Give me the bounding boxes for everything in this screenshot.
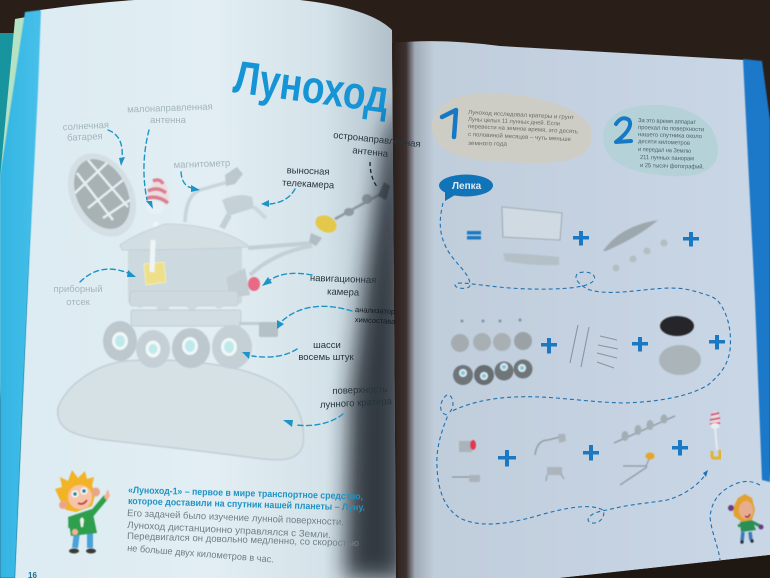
text block: description of Lunokhod-1: не больше двух километров в час. [127,543,274,566]
plus 4 [632,337,648,352]
right page blue strip [743,59,770,482]
dashed route [437,203,760,560]
navigation camera [226,268,260,298]
digit 2 [616,118,631,142]
title: Луноход [231,50,392,123]
panel: fact 1 bubble: Луны целых 11 лунных дней. Если [468,116,560,127]
step: navigation camera part [452,440,480,482]
plus 8 [672,440,688,456]
panel: fact 1 bubble [432,93,592,163]
labels and arrows: high-gain antenna: антенна [352,145,389,160]
labels and arrows: magnetometer: магнитометр [173,158,230,171]
step: antenna rod and arm [614,414,675,485]
speech bubble: modelling: Лепка [452,181,482,192]
text block: description of Lunokhod-1: Его задачей было изучение лунной поверхности. [127,508,344,528]
labels and arrows: chassis: шасси [313,340,341,351]
plus 6 [498,450,516,466]
text block: description of Lunokhod-1 [127,485,365,566]
labels and arrows: low-gain antenna: малонаправленная [127,102,213,115]
labels and arrows: solar battery: батарея [67,131,103,144]
plus 2 [683,232,699,246]
solar panel [54,142,150,248]
step: dark and grey discs [659,316,701,375]
wheels [103,321,252,369]
labels and arrows: low-gain antenna [127,102,213,209]
labels and arrows: high-gain antenna: остронаправленная [333,130,421,150]
step: wheels parts [451,318,532,385]
book cover edge: teal [0,33,16,180]
instrument body [128,246,242,304]
digit 1 [442,110,456,137]
labels and arrows: navigation camera: камера [327,286,360,299]
panel: fact 2 bubble: За это время аппарат [638,118,696,126]
panel: fact 1 bubble: Луноход исследовал кратеры и грунт [468,110,574,121]
step: assembled antenna [710,411,720,458]
labels and arrows: instrument bay [53,269,136,308]
panel: fact 2 bubble: проехал по поверхности [638,125,704,133]
panel: fact 2 bubble [603,105,718,176]
panel: fact 2 bubble: и передал на Землю [638,147,692,155]
labels and arrows: magnetometer [173,158,230,192]
panel: fact 2 bubble: десяти километров [638,139,690,147]
labels and arrows: instrument bay: отсек [66,297,91,308]
step: equals and slab parts [467,207,562,265]
labels and arrows: chassis: восемь штук [298,352,355,363]
lid [120,224,250,250]
plus 3 [541,338,557,354]
chemical analyzer [239,322,278,337]
plus 7 [583,445,599,460]
panel: fact 1 bubble: перевести на земное время, это десять [468,124,578,135]
labels and arrows: low-gain antenna: антенна [150,115,187,126]
magnetometer [185,167,243,222]
panel: fact 2 bubble: 211 лунных панорам [640,155,694,162]
crater surface [58,360,303,460]
panel: left page [15,0,396,578]
panel: fact 1 bubble: земного года [468,141,508,148]
left page blue strip [0,10,41,578]
labels and arrows: instrument bay: приборный [53,284,103,295]
step: thin rods [570,325,618,368]
panel: fact 2 bubble: и 25 тысяч фотографий. [640,162,704,171]
labels and arrows: external camera [261,165,335,207]
panel: fact 2 bubble: нашего спутника около [638,132,703,140]
bumpers [130,291,238,312]
text block: description of Lunokhod-1: которое доставили на спутник нашей планеты – Луну. [128,496,365,514]
labels and arrows: solar battery: солнечная [62,120,109,133]
labels and arrows: chemical analyzer: химсостава [355,315,396,326]
book edge: green page stack [0,17,26,400]
labels and arrows: external camera: выносная [286,165,330,178]
rover illustration [54,142,390,460]
high-gain antenna arm [248,182,390,275]
labels and arrows: chassis [242,340,355,363]
yellow block [144,262,166,285]
text block: description of Lunokhod-1: Луноход дистанционно управлялся с Земли. [127,520,331,541]
labels and arrows: navigation camera [262,273,376,299]
labels and arrows: crater surface: лунного кратера [320,396,393,411]
panel: fact 1 bubble: с половиной месяцев – чуть меньше [468,131,572,143]
labels and arrows: high-gain antenna [333,130,421,188]
step: crescent and balls [603,220,668,272]
labels and arrows: solar battery [62,120,125,166]
labels and arrows: chemical analyzer: анализатор [355,305,395,316]
low-gain antenna [146,178,169,270]
character: boy pointing [55,470,110,554]
table edge below the right page [560,555,770,578]
plus 1 [573,231,589,246]
labels and arrows: crater surface [283,384,393,427]
text block: description of Lunokhod-1: Передвигался он довольно медленно, со скоростью [127,531,359,549]
character: boy on right page [728,494,764,544]
labels and arrows: chemical analyzer [277,305,396,329]
speech bubble: modelling [439,174,493,201]
plus 5 [709,335,725,350]
labels and arrows: navigation camera: навигационная [310,273,376,286]
text block: description of Lunokhod-1: «Луноход-1» – первое в мире транспортное средство, [128,485,363,503]
gutter shadow over left page [345,100,402,578]
labels and arrows: crater surface: поверхность [332,384,388,397]
labels and arrows: external camera: телекамера [282,178,335,191]
external camera [222,195,266,228]
panel: right page [392,41,770,578]
step: magnetometer and camera parts [535,434,566,481]
